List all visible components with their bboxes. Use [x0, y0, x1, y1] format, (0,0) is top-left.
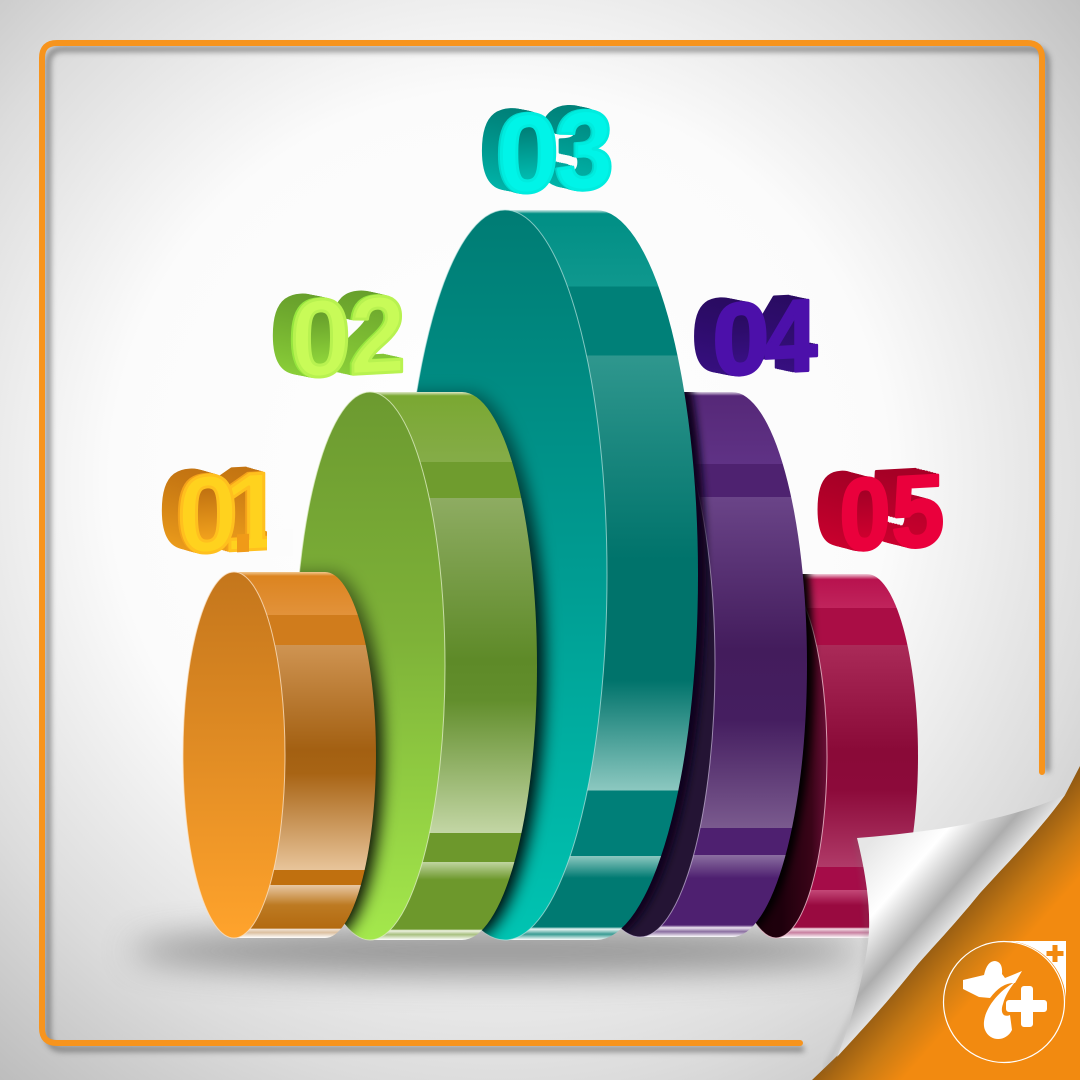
digit 4: 4 [758, 277, 811, 393]
digit 1: 1 [215, 447, 276, 573]
digit 0 [815, 448, 891, 574]
cylinder 05 crimson [725, 574, 918, 938]
shadow on crimson [756, 574, 820, 931]
digit 0 [692, 276, 769, 399]
digit 5: 5 [889, 452, 941, 569]
digit 0: 0 [497, 89, 559, 217]
number 03 [479, 81, 614, 218]
digit 0: 0 [495, 89, 557, 217]
digit 2: 2 [337, 270, 393, 395]
digit 2: 2 [348, 272, 404, 398]
digit 0: 0 [698, 278, 754, 395]
shadow on green [300, 562, 396, 936]
digit 3: 3 [549, 84, 606, 212]
cylinder 04 purple [621, 392, 820, 938]
digit 5: 5 [878, 449, 930, 566]
digit 0: 0 [272, 272, 333, 398]
digit 0: 0 [175, 451, 236, 577]
curl sheet [837, 795, 1065, 1057]
digit 2: 2 [350, 273, 406, 398]
digit 0: 0 [829, 453, 880, 570]
digit 4: 4 [760, 277, 813, 394]
number 05 [815, 446, 944, 574]
digit 0: 0 [290, 275, 351, 401]
number 04 [692, 273, 817, 399]
digit 0: 0 [831, 454, 882, 571]
digit 0: 0 [692, 277, 748, 394]
number 01 [159, 442, 293, 578]
digit 0: 0 [483, 86, 545, 214]
digit 0: 0 [487, 87, 549, 215]
digit 4: 4 [756, 276, 809, 393]
digit 0: 0 [815, 450, 866, 567]
digit 5: 5 [880, 450, 933, 566]
number 02 [270, 267, 406, 403]
digit 0: 0 [177, 451, 238, 577]
digit 2: 2 [342, 271, 398, 397]
digit 0: 0 [710, 280, 766, 397]
cylinder 03 teal [403, 210, 706, 940]
page curl [812, 766, 1080, 1080]
cylinder 01 orange [183, 572, 383, 938]
digit 1: 1 [209, 445, 270, 571]
shadow on teal [416, 384, 557, 939]
digit 1: 1 [223, 449, 284, 575]
digit 0: 0 [282, 274, 343, 400]
digit 0: 0 [712, 281, 769, 397]
digit 0: 0 [479, 85, 541, 213]
side of 1 over left foot [237, 534, 249, 552]
digit 0: 0 [288, 275, 349, 401]
digit 4: 4 [754, 276, 807, 393]
digit 0: 0 [694, 277, 750, 394]
digit 2: 2 [333, 269, 389, 395]
digit 0: 0 [696, 277, 752, 394]
logo ring [944, 942, 1064, 1062]
digit 0: 0 [834, 455, 885, 572]
digit 0: 0 [274, 272, 335, 398]
digit 4: 4 [762, 278, 815, 394]
digit 3: 3 [554, 86, 612, 214]
icon: small plus [1046, 945, 1064, 962]
digit 0: 0 [163, 447, 224, 574]
digit 0: 0 [171, 450, 232, 576]
digit 1: 1 [217, 447, 278, 573]
digit 0: 0 [284, 274, 345, 400]
digit 3: 3 [556, 86, 614, 214]
digit 5: 5 [892, 453, 944, 570]
digit 0: 0 [491, 88, 553, 216]
digit 5: 5 [883, 451, 936, 567]
digit 0: 0 [700, 278, 756, 395]
digit 2: 2 [340, 271, 397, 396]
digit 4 [745, 273, 817, 396]
digit 3: 3 [552, 85, 610, 213]
logo mark [963, 961, 1022, 998]
digit 3: 3 [550, 84, 608, 213]
logo corner with small plus [1004, 941, 1066, 1003]
digit 5 [869, 446, 944, 571]
digit 0: 0 [702, 279, 758, 396]
digit 0: 0 [280, 273, 341, 400]
shadow on purple [622, 392, 712, 934]
digit 3: 3 [545, 83, 603, 211]
page corner under the curl [812, 766, 1080, 1080]
digit 2: 2 [335, 269, 391, 395]
mask right foot of 1 [267, 529, 293, 557]
logo [944, 941, 1066, 1062]
digit 0: 0 [493, 89, 555, 217]
digit 2: 2 [338, 270, 395, 396]
digit 4: 4 [751, 275, 803, 392]
digit 0: 0 [837, 455, 888, 572]
digit 0: 0 [173, 450, 234, 576]
digit 1: 1 [219, 448, 280, 574]
digit 1: 1 [213, 446, 274, 572]
digit 3: 3 [541, 82, 599, 210]
digit 0: 0 [823, 452, 874, 569]
digit 0: 0 [707, 280, 764, 397]
digit 0: 0 [489, 87, 551, 215]
digit 2: 2 [346, 272, 402, 397]
digit 0: 0 [165, 448, 226, 574]
digit 1: 1 [207, 444, 268, 571]
digit 0: 0 [270, 271, 331, 398]
digit 0: 0 [485, 86, 547, 215]
digit 0: 0 [706, 279, 762, 396]
digit 4: 4 [745, 274, 798, 391]
digit 0: 0 [821, 451, 872, 568]
digit 1: 1 [211, 446, 272, 572]
digit 0: 0 [826, 452, 877, 570]
digit 3: 3 [543, 83, 601, 211]
digit 1: 1 [221, 448, 282, 574]
digit 5: 5 [872, 448, 925, 565]
digit 0: 0 [818, 451, 869, 568]
digit 0: 0 [840, 455, 891, 573]
digit 0: 0 [159, 446, 220, 572]
digit 4: 4 [752, 276, 805, 392]
floor shadow [130, 926, 860, 976]
digit 5: 5 [869, 447, 922, 564]
curl shadow [825, 838, 867, 1070]
digit 2: 2 [344, 271, 400, 397]
digit 0: 0 [278, 273, 339, 399]
digit 2: 2 [331, 269, 387, 394]
digit 5: 5 [886, 451, 939, 568]
digit 4: 4 [749, 275, 802, 391]
digit 5: 5 [875, 449, 928, 565]
digit 4: 4 [764, 278, 817, 395]
digit 1: 1 [205, 444, 266, 570]
digit 3: 3 [539, 82, 597, 210]
digit 0: 0 [286, 275, 347, 401]
digit 0: 0 [704, 279, 760, 396]
digit 4: 4 [747, 274, 800, 391]
digit 0: 0 [167, 449, 228, 575]
digit 3: 3 [547, 83, 605, 212]
digit 0: 0 [481, 86, 543, 214]
cylinder 02 green [295, 392, 545, 940]
digit 0: 0 [169, 449, 230, 575]
digit 0: 0 [161, 447, 222, 573]
digit 0: 0 [276, 273, 337, 399]
